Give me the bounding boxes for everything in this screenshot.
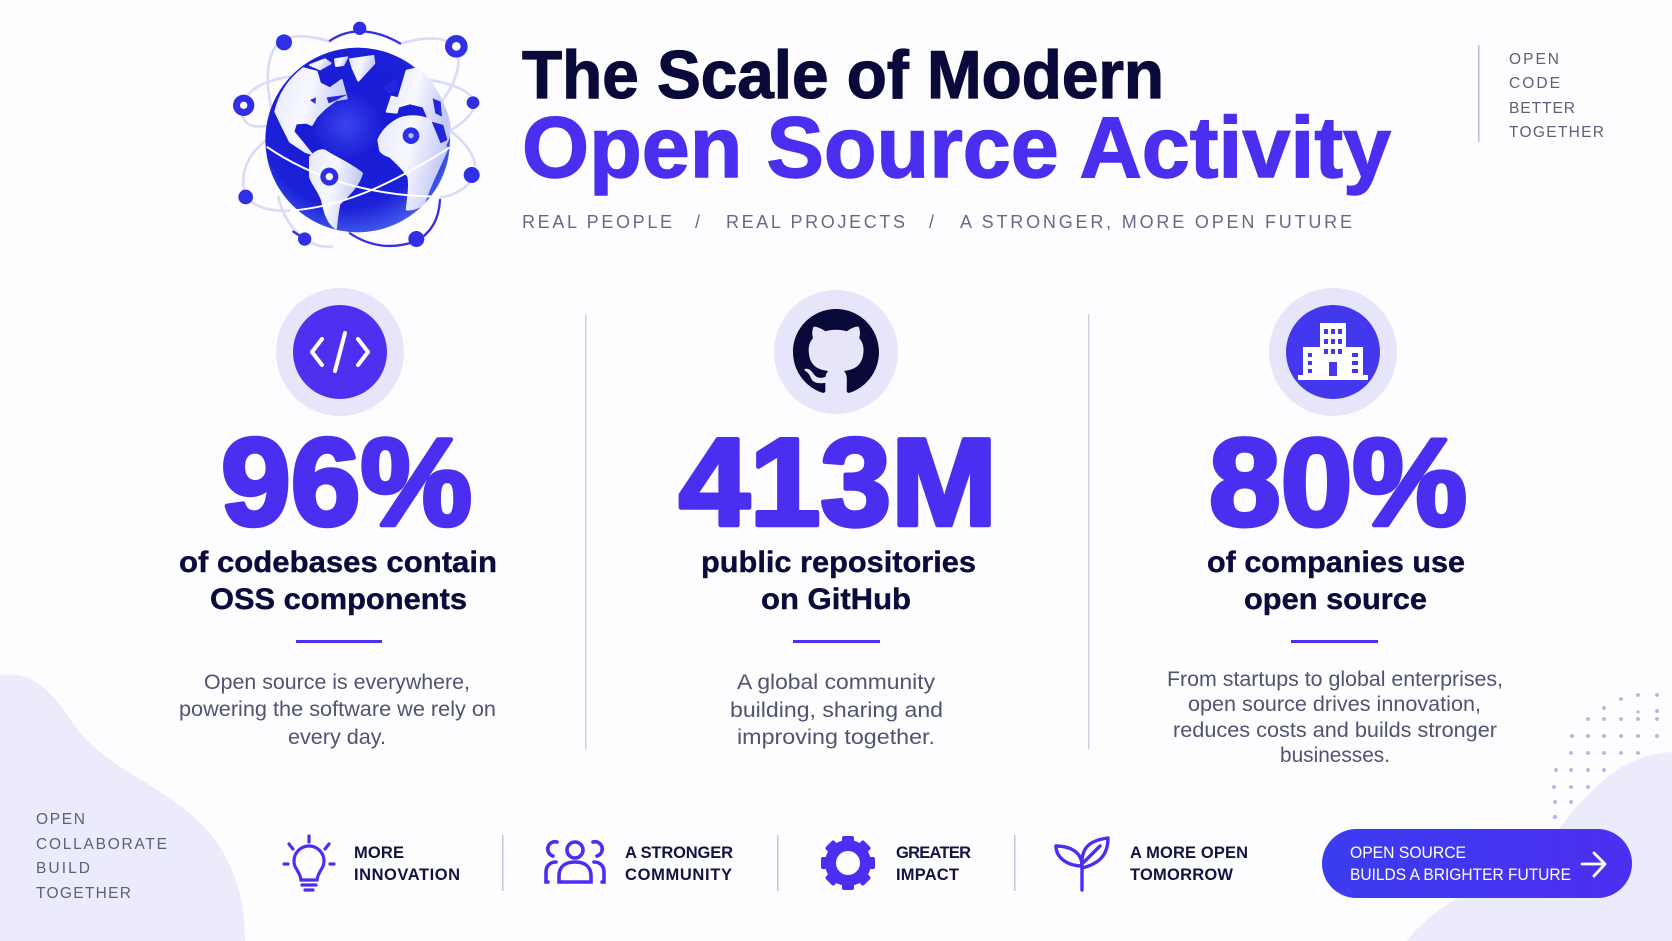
description [179,671,496,749]
stat label [179,546,497,616]
stat label: of codebases contain [179,546,497,579]
bottom left tagline [36,811,167,902]
dot pattern [1552,693,1659,819]
benefit: more innovation [284,836,460,890]
panel: 96% of codebases [179,288,497,749]
icon: light bulb [284,836,334,890]
stat label: open source [1244,583,1427,616]
call to action button [1322,829,1632,898]
description: open source drives innovation, [1188,693,1481,716]
icon: buildings [1269,288,1397,416]
subtitle: / [695,212,700,232]
benefit: more innovation: INNOVATION [354,866,460,884]
icon: sprout [1056,838,1108,890]
icon: gear [821,836,875,890]
bottom left tagline: TOGETHER [36,885,131,902]
description [730,671,943,749]
bottom left tagline: BUILD [36,860,90,877]
icon: people [546,842,604,882]
icon: GitHub [774,290,898,414]
subtitle: REAL PEOPLE [522,212,672,232]
subtitle: / [929,212,934,232]
icon: arrow [1582,853,1605,876]
top right tagline: OPEN [1509,51,1559,68]
subtitle: A STRONGER, MORE OPEN FUTURE [960,212,1352,232]
description: Open source is everywhere, [204,671,470,694]
description: businesses. [1280,744,1390,767]
stat: 80%: 80% [1209,414,1467,552]
icon: code [276,288,404,416]
top right tagline: TOGETHER [1509,124,1604,141]
globe with orbiting nodes [233,22,480,247]
stat label: public repositories [701,546,976,579]
benefit: a stronger community [546,842,733,884]
title [522,37,1391,196]
call to action button: BUILDS A BRIGHTER FUTURE [1350,866,1571,884]
bottom left tagline: COLLABORATE [36,836,167,853]
stat: 413M: 413M [679,414,997,552]
top right tagline: CODE [1509,75,1560,92]
description: powering the software we rely on [179,698,496,721]
benefit: a more open tomorrow [1056,838,1248,890]
stat: 96%: 96% [221,414,472,552]
stat label: on GitHub [761,583,911,616]
subtitle: REAL PROJECTS [726,212,905,232]
benefit: a more open tomorrow: TOMORROW [1130,866,1233,884]
stat label: OSS components [210,583,467,616]
top right tagline [1478,45,1604,142]
benefit: greater impact: GREATER [896,844,971,862]
background blob: bottom right [1407,752,1672,941]
benefit: greater impact: IMPACT [896,866,959,884]
stat label [701,546,976,616]
subtitle [522,212,1352,232]
title: The Scale of Modern [522,37,1164,113]
benefit: a stronger community: COMMUNITY [625,866,732,884]
benefit: greater impact [821,836,971,890]
stat label [1207,546,1465,616]
benefit: more innovation: MORE [354,844,404,862]
background blob: bottom left [0,674,245,941]
panel: 80% of companies [1167,288,1503,767]
description: From startups to global enterprises, [1167,668,1503,691]
top right tagline: BETTER [1509,100,1575,117]
title: Open Source Activity [522,100,1391,196]
panel: 413M repositories [679,290,997,749]
bottom left tagline: OPEN [36,811,85,828]
description: building, sharing and [730,699,943,722]
description [1167,668,1503,767]
description: every day. [288,726,386,749]
description: A global community [737,671,936,694]
description: improving together. [737,726,935,749]
benefit: a stronger community: A STRONGER [625,844,733,862]
stat label: of companies use [1207,546,1465,579]
call to action button: OPEN SOURCE [1350,844,1466,862]
benefit: a more open tomorrow: A MORE OPEN [1130,844,1248,862]
description: reduces costs and builds stronger [1173,719,1497,742]
